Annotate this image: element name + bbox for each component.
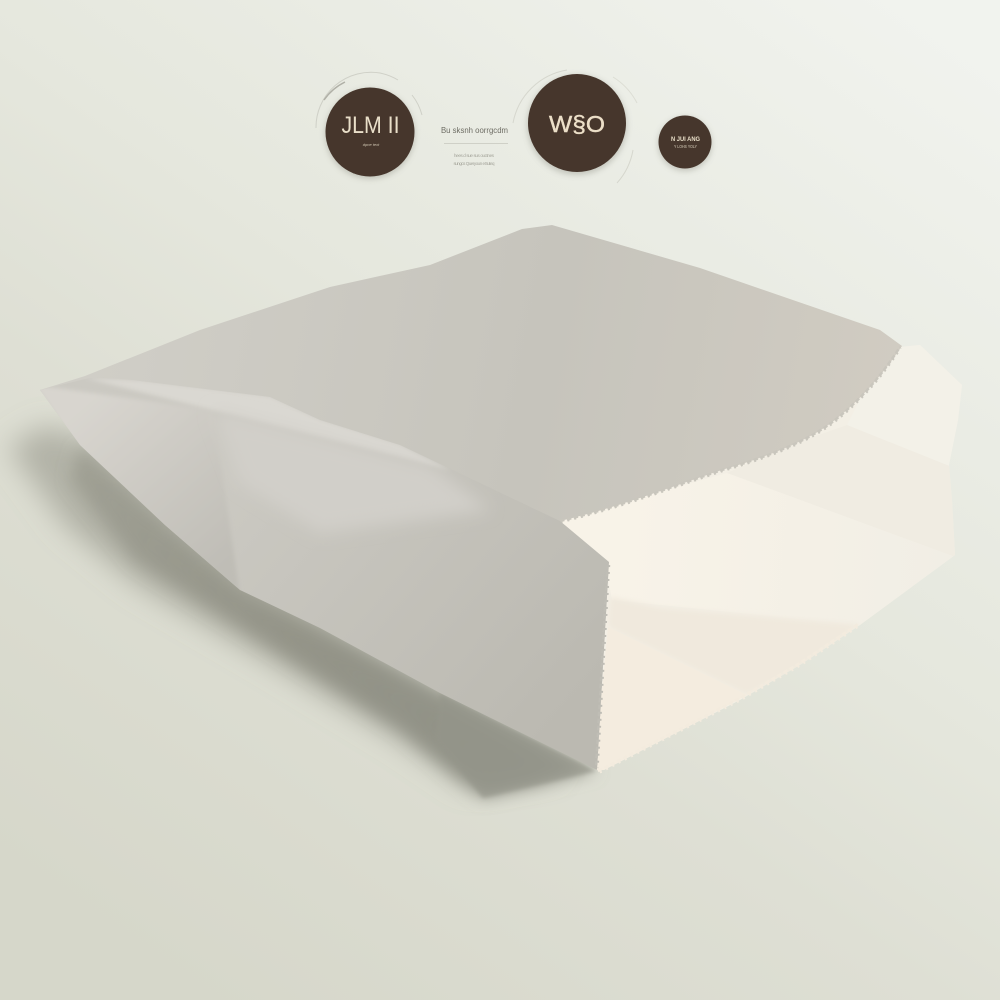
centre caption xyxy=(441,126,508,166)
centre caption: sungcs Queryoun eSuteq xyxy=(454,161,495,166)
top serrated edge xyxy=(560,347,900,522)
badge disc xyxy=(325,89,415,179)
front serrated edge xyxy=(596,565,609,768)
badge: WSO xyxy=(513,70,637,183)
interior lower band xyxy=(614,606,835,688)
badge title: N JUI ANG xyxy=(671,136,700,143)
mid flap facet xyxy=(258,441,476,528)
badge ring xyxy=(316,72,422,128)
top flap facet xyxy=(100,379,440,466)
paper bag xyxy=(35,225,970,780)
bag cast shadow xyxy=(8,425,597,798)
bag front panel xyxy=(35,378,609,770)
badge subtitle: dpne text xyxy=(363,142,380,147)
interior top band xyxy=(847,340,965,468)
caption rule xyxy=(444,143,508,144)
badge subtitle: Y LOHS YOLY xyxy=(674,144,697,149)
caption heading: Bu sksnh oorrgcdm xyxy=(441,126,508,135)
bag back panel xyxy=(40,225,902,521)
badge title: W§O xyxy=(549,111,605,137)
badge disc xyxy=(658,117,712,171)
bag interior xyxy=(562,346,962,770)
badge: JLM II xyxy=(316,72,422,179)
badge ring xyxy=(513,70,637,183)
badge: small xyxy=(658,116,712,171)
bottom serrated edge xyxy=(598,624,860,772)
left facet xyxy=(40,388,236,585)
interior bottom band xyxy=(594,627,747,772)
badge disc xyxy=(527,75,627,175)
caption detail lines: hees d sue sus ouctnes xyxy=(454,153,495,158)
badge title: JLM II xyxy=(342,112,400,139)
interior main band xyxy=(555,473,958,625)
interior second band xyxy=(727,425,958,558)
